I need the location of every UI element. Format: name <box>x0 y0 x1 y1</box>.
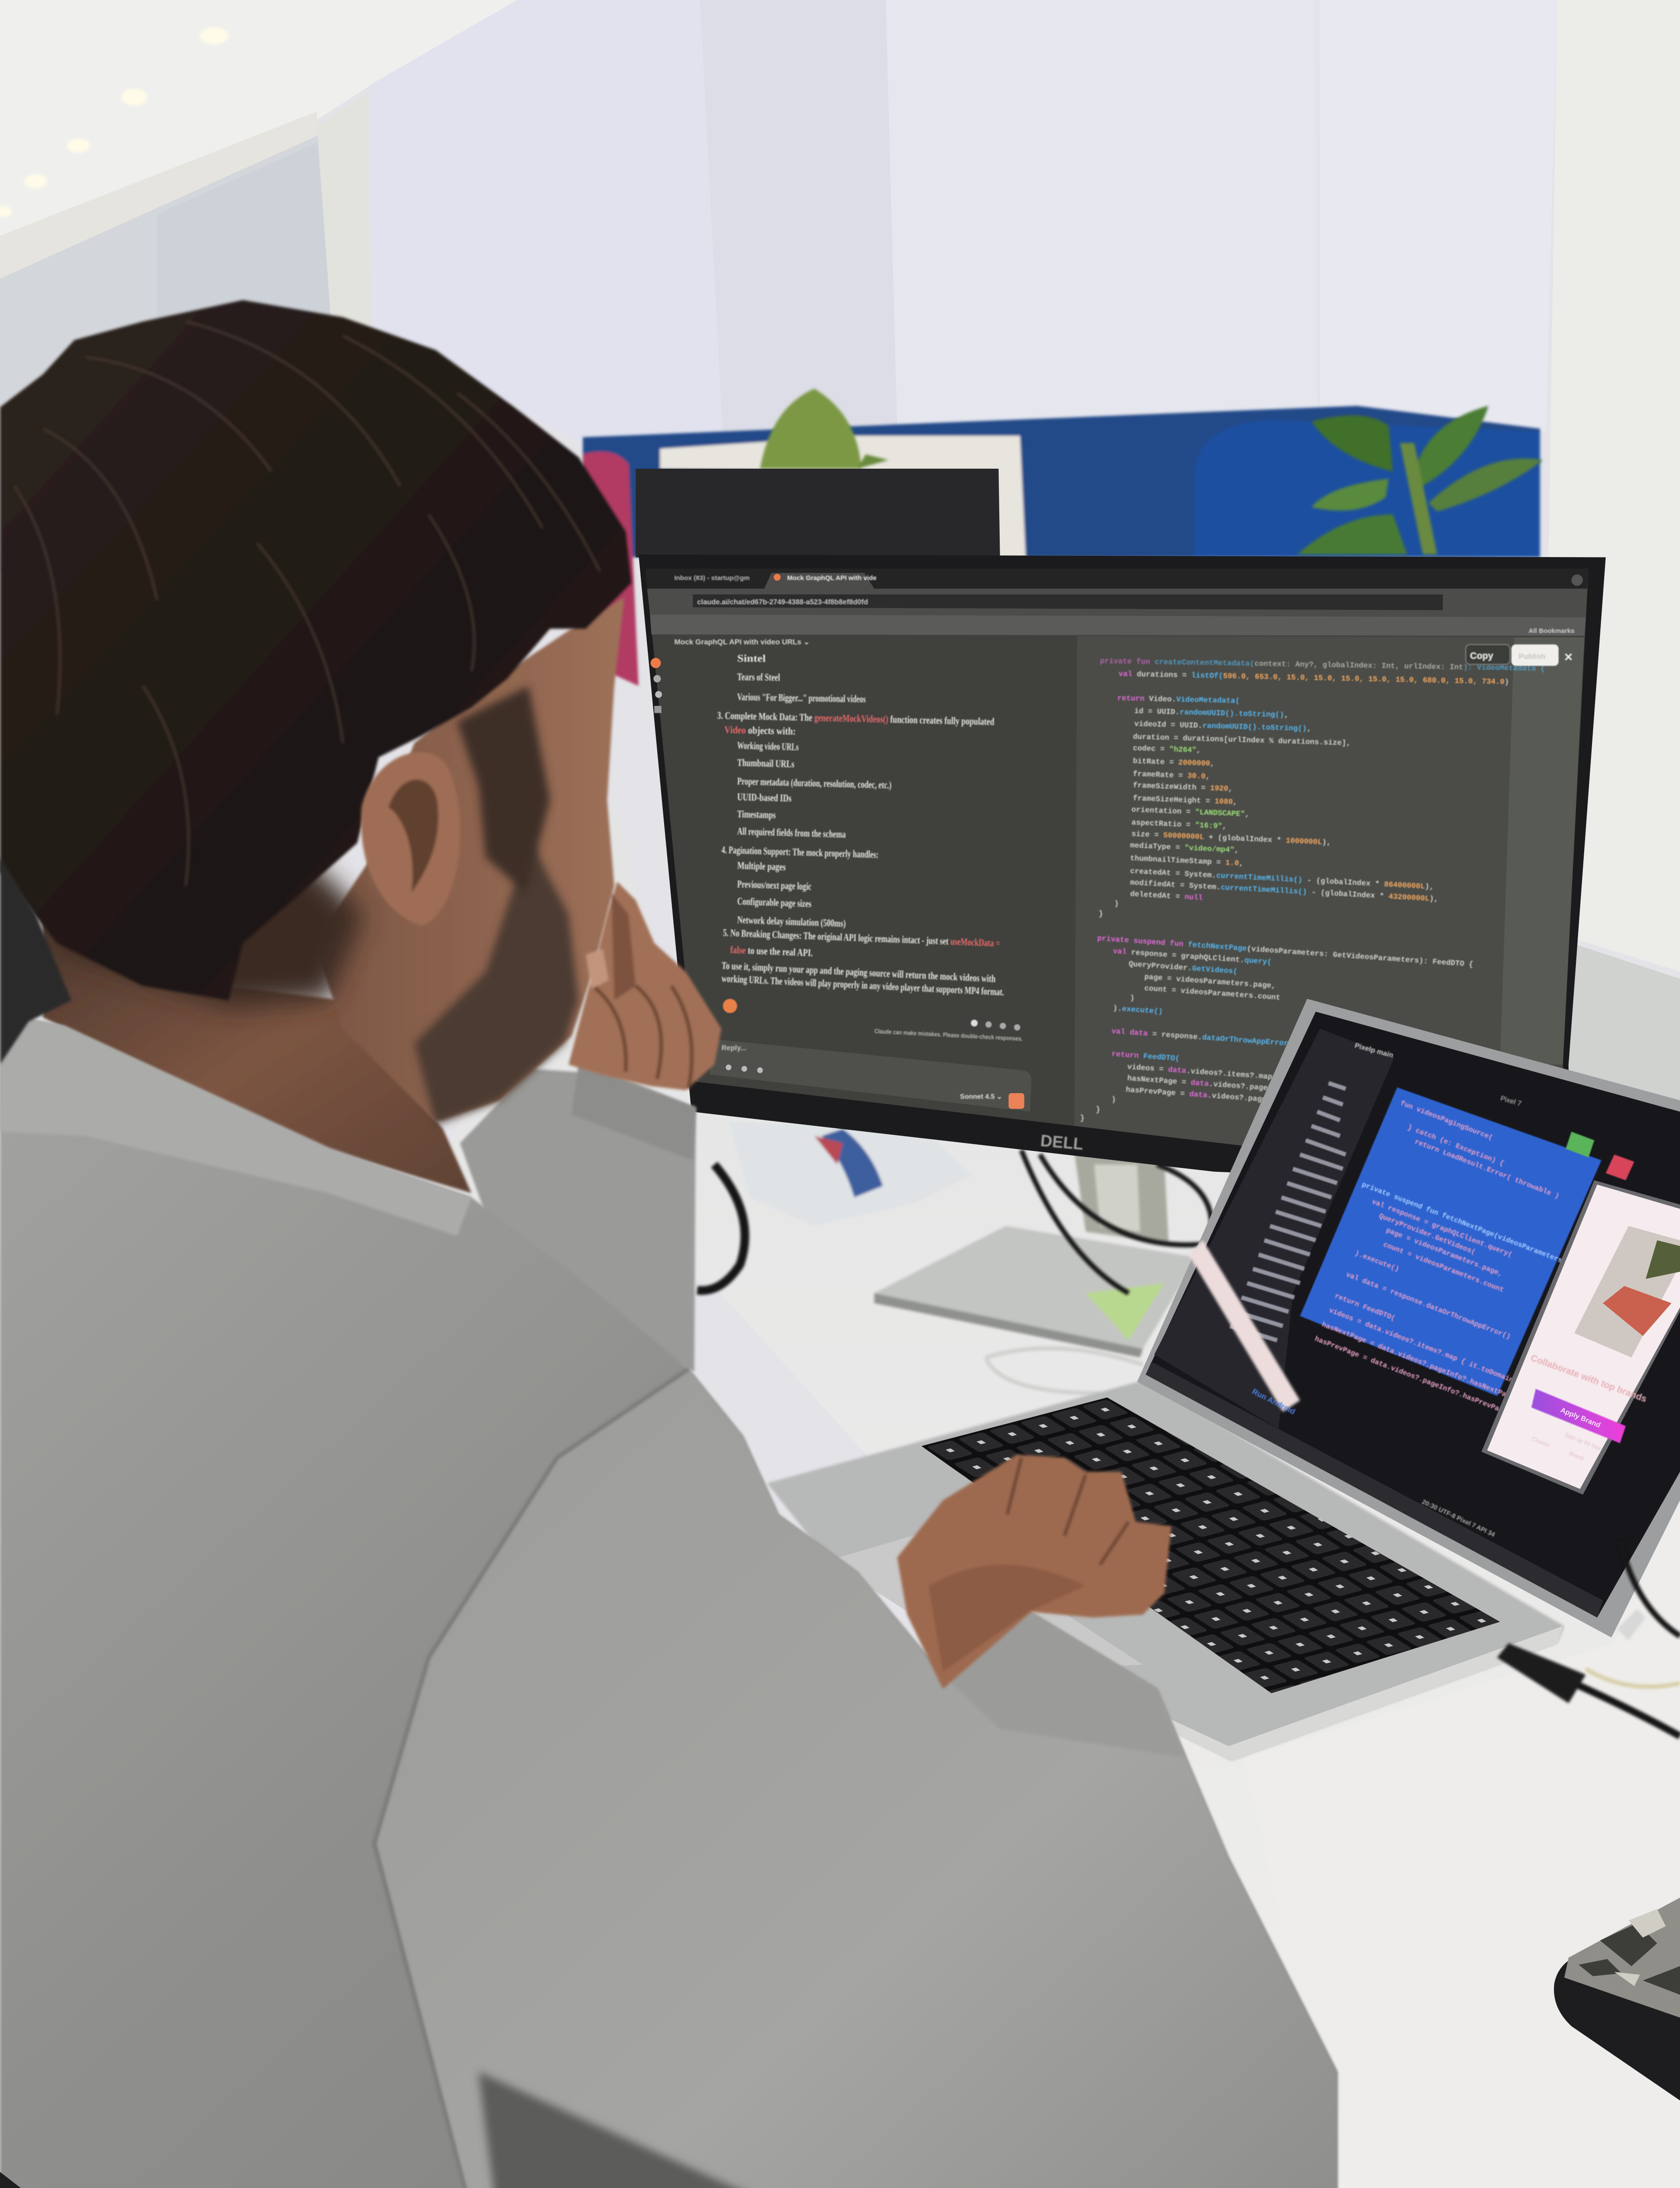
laptop lid <box>1137 999 1680 1637</box>
code artifact text: frameSizeWidth = 1920, <box>1133 782 1233 794</box>
code artifact text: id = UUID.randomUUID().toString(), <box>1134 707 1289 720</box>
ide status text: Run Android <box>1251 1387 1297 1416</box>
faded hairline <box>43 857 364 1007</box>
code artifact text: ) <box>1114 900 1119 908</box>
code artifact text: orientation = "LANDSCAPE", <box>1131 806 1250 819</box>
monitor <box>639 554 1606 1186</box>
chat response text: Previous/next page logic <box>737 879 812 892</box>
code artifact text: ).execute() <box>1113 1005 1163 1017</box>
ide status text: 20:30 UTF-8 Pixel 7 API 34 <box>1421 1498 1496 1539</box>
code artifact text: } <box>1080 1115 1085 1123</box>
chat response text: Thumbnail URLs <box>737 757 794 770</box>
ide selected code: QueryProvider.GetVideos( <box>1378 1212 1477 1256</box>
code artifact text: return FeedDTO( <box>1111 1050 1180 1063</box>
plastic bag on desk <box>728 1122 971 1226</box>
ide tabs and toolbar: Pixelp main <box>1354 1041 1394 1059</box>
disclaimer and action icons: Claude can make mistakes. Please double-check responses. <box>874 1027 1023 1042</box>
desk cables <box>697 1150 1214 1393</box>
desk surface <box>429 800 1680 2188</box>
ide selected code: hasNextPage = data.videos?.pageInfo?.hasNextPage, <box>1321 1320 1519 1403</box>
copy and publish buttons: × <box>1564 649 1573 665</box>
ide selected code: ).execute() <box>1354 1249 1400 1273</box>
chat response text: working URLs. The videos will play properly in any video player that supports MP4 format. <box>721 973 1004 998</box>
laptop charging cables <box>1497 1540 1680 1736</box>
sideburn <box>457 686 550 893</box>
hair highlights <box>14 322 600 886</box>
code artifact text: return Video.VideoMetadata( <box>1117 694 1240 705</box>
ide sidebar <box>1154 1029 1394 1429</box>
laptop <box>767 999 1680 1760</box>
browser address bar: All Bookmarks <box>1529 628 1575 635</box>
laptop base <box>767 1380 1564 1760</box>
code artifact text: val durations = listOf(596.0, 653.0, 15.0, 15.0, 15.0, 15.0, 15.0, 680.0, 15.0, 734.0) <box>1119 670 1509 687</box>
chat title: Mock GraphQL API with video URLs ⌄ <box>674 638 810 646</box>
screen glare streak <box>1189 1240 1300 1412</box>
dell logo: DELL <box>1040 1131 1084 1153</box>
chat response text: 5. No Breaking Changes: The original API logic remains intact - just set useMockData = <box>723 927 1000 949</box>
code artifact text: frameSizeHeight = 1080, <box>1133 795 1237 807</box>
app small text: Creator <box>1531 1435 1551 1449</box>
code artifact text: hasNextPage = data.videos?.pageInfo <box>1127 1075 1286 1094</box>
chat response text <box>717 653 1004 998</box>
chat response text: Timestamps <box>737 809 776 821</box>
code artifact text: videoId = UUID.randomUUID().toString(), <box>1134 720 1312 733</box>
chat response text: Tears of Steel <box>737 671 780 684</box>
ide selected code: videos = data.videos?.items?.map { it.toDomain() } ?: emptyList(), <box>1328 1306 1595 1415</box>
monitor screen background <box>646 569 1589 1183</box>
code artifact text: videos = data.videos?.items?.map <box>1127 1063 1273 1082</box>
code artifact text: size = 50000000L + (globalIndex * 1000000L), <box>1131 830 1331 847</box>
code artifact text: QueryProvider.GetVideos( <box>1128 960 1238 976</box>
left background edge behind person <box>0 857 71 1065</box>
face <box>314 597 624 1122</box>
ide file tree rows <box>1230 1083 1346 1340</box>
app image card <box>1574 1226 1680 1357</box>
chat response text: 3. Complete Mock Data: The generateMockVideos() function creates fully populated <box>717 710 994 728</box>
code artifact text: val response = graphQLClient.query( <box>1113 947 1272 967</box>
browser tabs <box>674 573 1583 589</box>
sweater cuff shading <box>571 1065 696 1160</box>
code artifact panel <box>1074 636 1584 1183</box>
reply input box: Sonnet 4.5 ⌄ <box>960 1093 1002 1101</box>
ide selected code: val data = response.dataOrThrowAppError() <box>1345 1270 1512 1341</box>
person <box>0 300 1337 2188</box>
code artifact text: modifiedAt = System.currentTimeMillis() - (globalIndex * 43200000L), <box>1130 879 1438 904</box>
copy and publish buttons: Publish <box>1519 652 1545 660</box>
chat response text: false to use the real API. <box>730 944 813 959</box>
potted plant on the right <box>1297 406 1543 554</box>
code artifact text: duration = durations[urlIndex % durations.size], <box>1133 733 1351 748</box>
code artifact text <box>1080 657 1545 1123</box>
code artifact text: page = videosParameters.page, <box>1144 973 1276 991</box>
ide tabs and toolbar <box>1354 1041 1634 1180</box>
code artifact text: thumbnailTimeStamp = 1.0, <box>1130 855 1244 868</box>
app small text: Brand <box>1568 1450 1585 1462</box>
code artifact text: frameRate = 30.0, <box>1133 770 1210 781</box>
code artifact text: codec = "h264", <box>1133 744 1201 755</box>
assistant logo spark <box>723 999 737 1013</box>
ide selected code: count = videosParameters.count <box>1382 1240 1505 1294</box>
chat response text: Various "For Bigger..." promotional videos <box>737 691 866 705</box>
ide status text <box>1251 1387 1496 1539</box>
raised forearm sleeve <box>460 1069 696 1372</box>
chat response text: 4. Pagination Support: The mock properly handles: <box>721 844 879 861</box>
laptop keyboard <box>921 1397 1500 1693</box>
browser address bar <box>647 589 1587 636</box>
chat response text: Proper metadata (duration, resolution, codec, etc.) <box>737 776 892 791</box>
chat response text: Configurable page sizes <box>737 896 812 910</box>
torso shadow at bottom <box>479 2072 878 2188</box>
chat response text: UUID-based IDs <box>737 792 791 804</box>
chat response text: Working video URLs <box>737 740 799 753</box>
beard <box>414 843 578 1125</box>
code artifact text: aspectRatio = "16:9", <box>1131 819 1227 831</box>
code artifact text: private fun createContentMetadata(context: Any?, globalIndex: Int, urlIndex: Int): VideoMetadata { <box>1100 657 1545 673</box>
reply input box: Reply... <box>721 1044 746 1052</box>
plant behind sofa <box>760 389 889 469</box>
ide selected code <box>1313 1099 1680 1417</box>
browser tabs: Mock GraphQL API with vide <box>787 575 877 582</box>
monitor stand and base <box>874 1152 1197 1357</box>
copy and publish buttons <box>1466 645 1573 666</box>
ide selected code: return FeedDTO( <box>1334 1292 1396 1322</box>
ide selected code: fun videosPagingSource( <box>1399 1099 1494 1142</box>
copy and publish buttons: Copy <box>1470 651 1493 661</box>
blue sofa with cushions <box>583 406 1540 686</box>
browser tabs: Inbox (83) - startup@gm <box>674 575 750 582</box>
typing hand <box>897 1455 1172 1689</box>
chat side rail icons <box>651 658 662 713</box>
laptop screen <box>1146 1012 1680 1617</box>
code artifact text: mediaType = "video/mp4", <box>1130 842 1239 855</box>
sleeve cuff <box>943 1612 1186 1757</box>
chat response text: Video objects with: <box>724 724 796 737</box>
browser tab bar <box>646 569 1589 589</box>
ide selected code: private suspend fun fetchNextPage(videosParameters: GetVideosParameters): FeedD <box>1361 1180 1680 1309</box>
hair <box>0 300 631 1000</box>
sleeve seam <box>374 1369 689 2188</box>
disclaimer and action icons <box>874 1020 1023 1042</box>
browser address bar: claude.ai/chat/ed67b-2749-4388-a523-4f8b8ef8d0fd <box>697 598 868 606</box>
ceiling spot lights <box>0 27 228 217</box>
app heading: Collaborate with top brands <box>1529 1353 1648 1404</box>
app small text <box>1531 1431 1603 1462</box>
ide selected code: hasPrevPage = data.videos?.pageInfo?.hasPrevPage, <box>1313 1335 1512 1417</box>
chat response text: Sintel <box>737 653 766 664</box>
chair behind person <box>0 2172 878 2188</box>
code artifact text: createdAt = System.currentTimeMillis() - (globalIndex * 86400000L), <box>1130 867 1434 891</box>
ide blue code selection <box>1300 1087 1601 1396</box>
sweater torso <box>0 1017 1337 2188</box>
ide selected code: } catch (e: Exception) { <box>1407 1123 1505 1168</box>
ide selected code: page = videosParameters.page, <box>1385 1226 1504 1278</box>
ear <box>361 752 460 926</box>
ide selected code: return LoadResult.Error( throwable ) <box>1414 1137 1561 1200</box>
phone with camouflage case <box>1554 1897 1680 2100</box>
code artifact text: ) <box>1111 1096 1116 1105</box>
code artifact text: } <box>1099 910 1103 919</box>
sweater collar <box>0 1017 472 1236</box>
code artifact text: val data = response.dataOrThrowAppError() <box>1111 1027 1298 1048</box>
code artifact text: count = videosParameters.count <box>1144 985 1281 1003</box>
hand at chin <box>569 882 721 1090</box>
reply input box <box>710 1039 1032 1112</box>
code artifact text: ) <box>1130 995 1134 1003</box>
neck <box>43 915 472 1193</box>
ide tabs and toolbar: Pixel 7 <box>1499 1094 1522 1108</box>
code artifact text: hasPrevPage = data.videos?.pageInfo <box>1126 1086 1284 1105</box>
ide selected code: val response = graphQLClient.query( <box>1371 1197 1514 1259</box>
chat response text: To use it, simply run your app and the paging source will return the mock videos with <box>721 960 996 985</box>
app gradient button <box>1531 1389 1626 1443</box>
phone emulator: Apply Brand <box>1559 1406 1602 1429</box>
code artifact text: } <box>1096 1106 1100 1114</box>
chat response text: Network delay simulation (500ms) <box>737 914 846 929</box>
phone emulator <box>1481 1180 1680 1495</box>
chat response text: All required fields from the schema <box>737 826 846 840</box>
monitor bezel <box>639 554 1606 1186</box>
code artifact text: bitRate = 2000000, <box>1133 757 1215 768</box>
sweater sleeve <box>374 1369 1337 2188</box>
app small text: Sign up for free <box>1564 1431 1603 1452</box>
code artifact text: private suspend fun fetchNextPage(videosParameters: GetVideosParameters): FeedDTO { <box>1097 935 1474 969</box>
dark rear monitor <box>636 469 1000 557</box>
chat response text: Multiple pages <box>737 860 786 873</box>
code artifact text: deletedAt = null <box>1130 890 1203 903</box>
